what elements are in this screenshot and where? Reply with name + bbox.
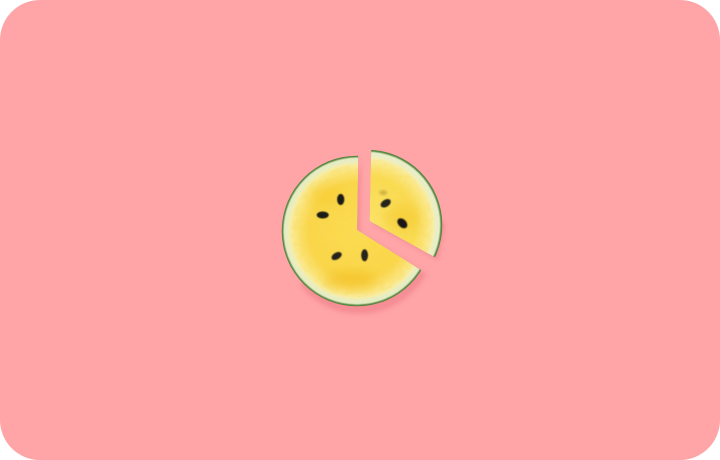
small watermelon slice [370, 150, 442, 258]
seed [380, 198, 392, 208]
seed [337, 194, 344, 205]
watermelon pie chart [282, 150, 445, 314]
large watermelon slice [282, 155, 432, 310]
flesh texture [291, 165, 413, 297]
flesh texture [374, 160, 432, 252]
seed [361, 249, 368, 261]
seed [330, 251, 343, 261]
seed [396, 217, 408, 230]
faint seed [379, 190, 387, 195]
seed [317, 212, 329, 218]
large slice shadow [300, 160, 426, 314]
small slice shadow [373, 170, 445, 260]
